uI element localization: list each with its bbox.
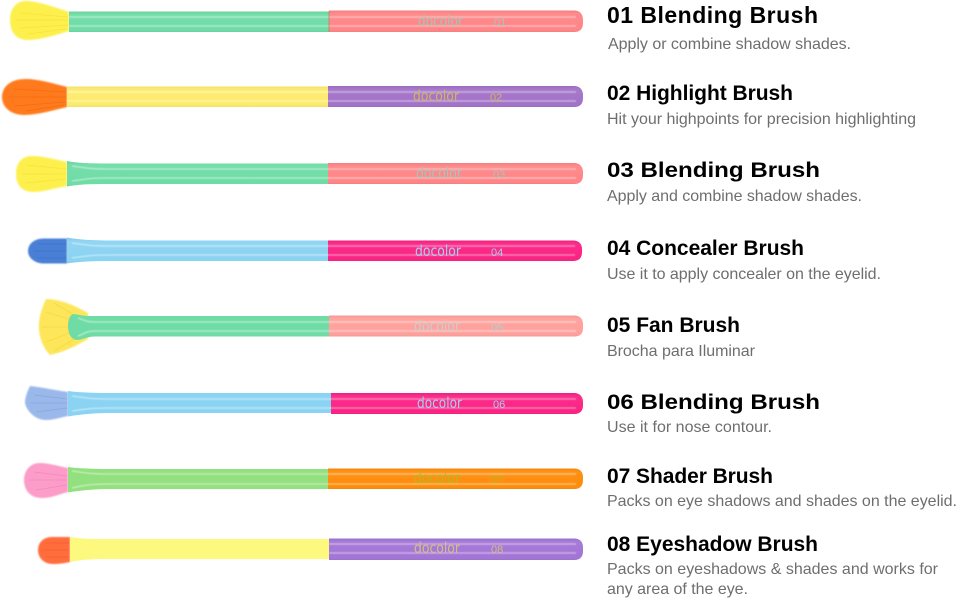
brush 02: 02 bbox=[490, 92, 502, 104]
item 01 text: Apply or combine shadow shades. bbox=[608, 36, 851, 53]
brush 05: docolor bbox=[414, 317, 461, 335]
item 08 text: any area of the eye. bbox=[607, 581, 748, 598]
brush 04: docolor bbox=[415, 242, 462, 260]
brush 02 bbox=[2, 79, 583, 115]
item 07 text bbox=[607, 465, 957, 510]
item 02 text bbox=[607, 82, 916, 128]
brush 06: 06 bbox=[493, 399, 505, 411]
brush 08: docolor bbox=[414, 539, 461, 557]
brush 07: docolor bbox=[414, 469, 461, 487]
item 08 text: Packs on eyeshadows & shades and works for bbox=[607, 561, 939, 578]
item 06 text bbox=[607, 390, 820, 436]
item 04 text: Use it to apply concealer on the eyelid. bbox=[607, 266, 881, 283]
item 01 text bbox=[607, 2, 851, 53]
brush 08: 08 bbox=[491, 544, 503, 556]
brush 05: 05 bbox=[491, 322, 503, 334]
brush 04 bbox=[28, 238, 582, 264]
item 04 text: 04 Concealer Brush bbox=[607, 237, 804, 260]
item 03 text: Apply and combine shadow shades. bbox=[607, 188, 862, 205]
brush 08 bbox=[38, 537, 583, 564]
item 02 text: 02 Highlight Brush bbox=[607, 82, 793, 105]
brush 02: docolor bbox=[413, 87, 460, 105]
brush 03 bbox=[16, 156, 583, 192]
item 05 text: Brocha para Iluminar bbox=[607, 343, 756, 360]
item 03 text bbox=[607, 158, 862, 205]
brush 01: 01 bbox=[494, 17, 506, 29]
brush 04: 04 bbox=[491, 247, 503, 259]
item 05 text: 05 Fan Brush bbox=[607, 314, 740, 337]
item 06 text: Use it for nose contour. bbox=[607, 419, 772, 436]
item 07 text: 07 Shader Brush bbox=[607, 465, 773, 488]
brush 01: docolor bbox=[418, 12, 464, 30]
brush 07: 07 bbox=[491, 474, 503, 486]
brush 03: docolor bbox=[416, 164, 463, 182]
item 08 text: 08 Eyeshadow Brush bbox=[607, 533, 818, 556]
brush 01 bbox=[10, 1, 583, 40]
brush 07 bbox=[24, 463, 583, 498]
item 02 text: Hit your highpoints for precision highlighting bbox=[607, 111, 916, 128]
brush 05 bbox=[39, 299, 583, 355]
brush 06 bbox=[25, 386, 583, 420]
item 03 text: 03 Blending Brush bbox=[607, 158, 820, 182]
item 08 text bbox=[607, 533, 939, 598]
item 07 text: Packs on eye shadows and shades on the eyelid. bbox=[607, 493, 957, 510]
brush 03: 03 bbox=[493, 169, 505, 181]
item 04 text bbox=[607, 237, 881, 283]
item 05 text bbox=[607, 314, 756, 360]
item 01 text: 01 Blending Brush bbox=[607, 2, 818, 28]
brush 06: docolor bbox=[417, 394, 463, 412]
item 06 text: 06 Blending Brush bbox=[607, 390, 820, 414]
